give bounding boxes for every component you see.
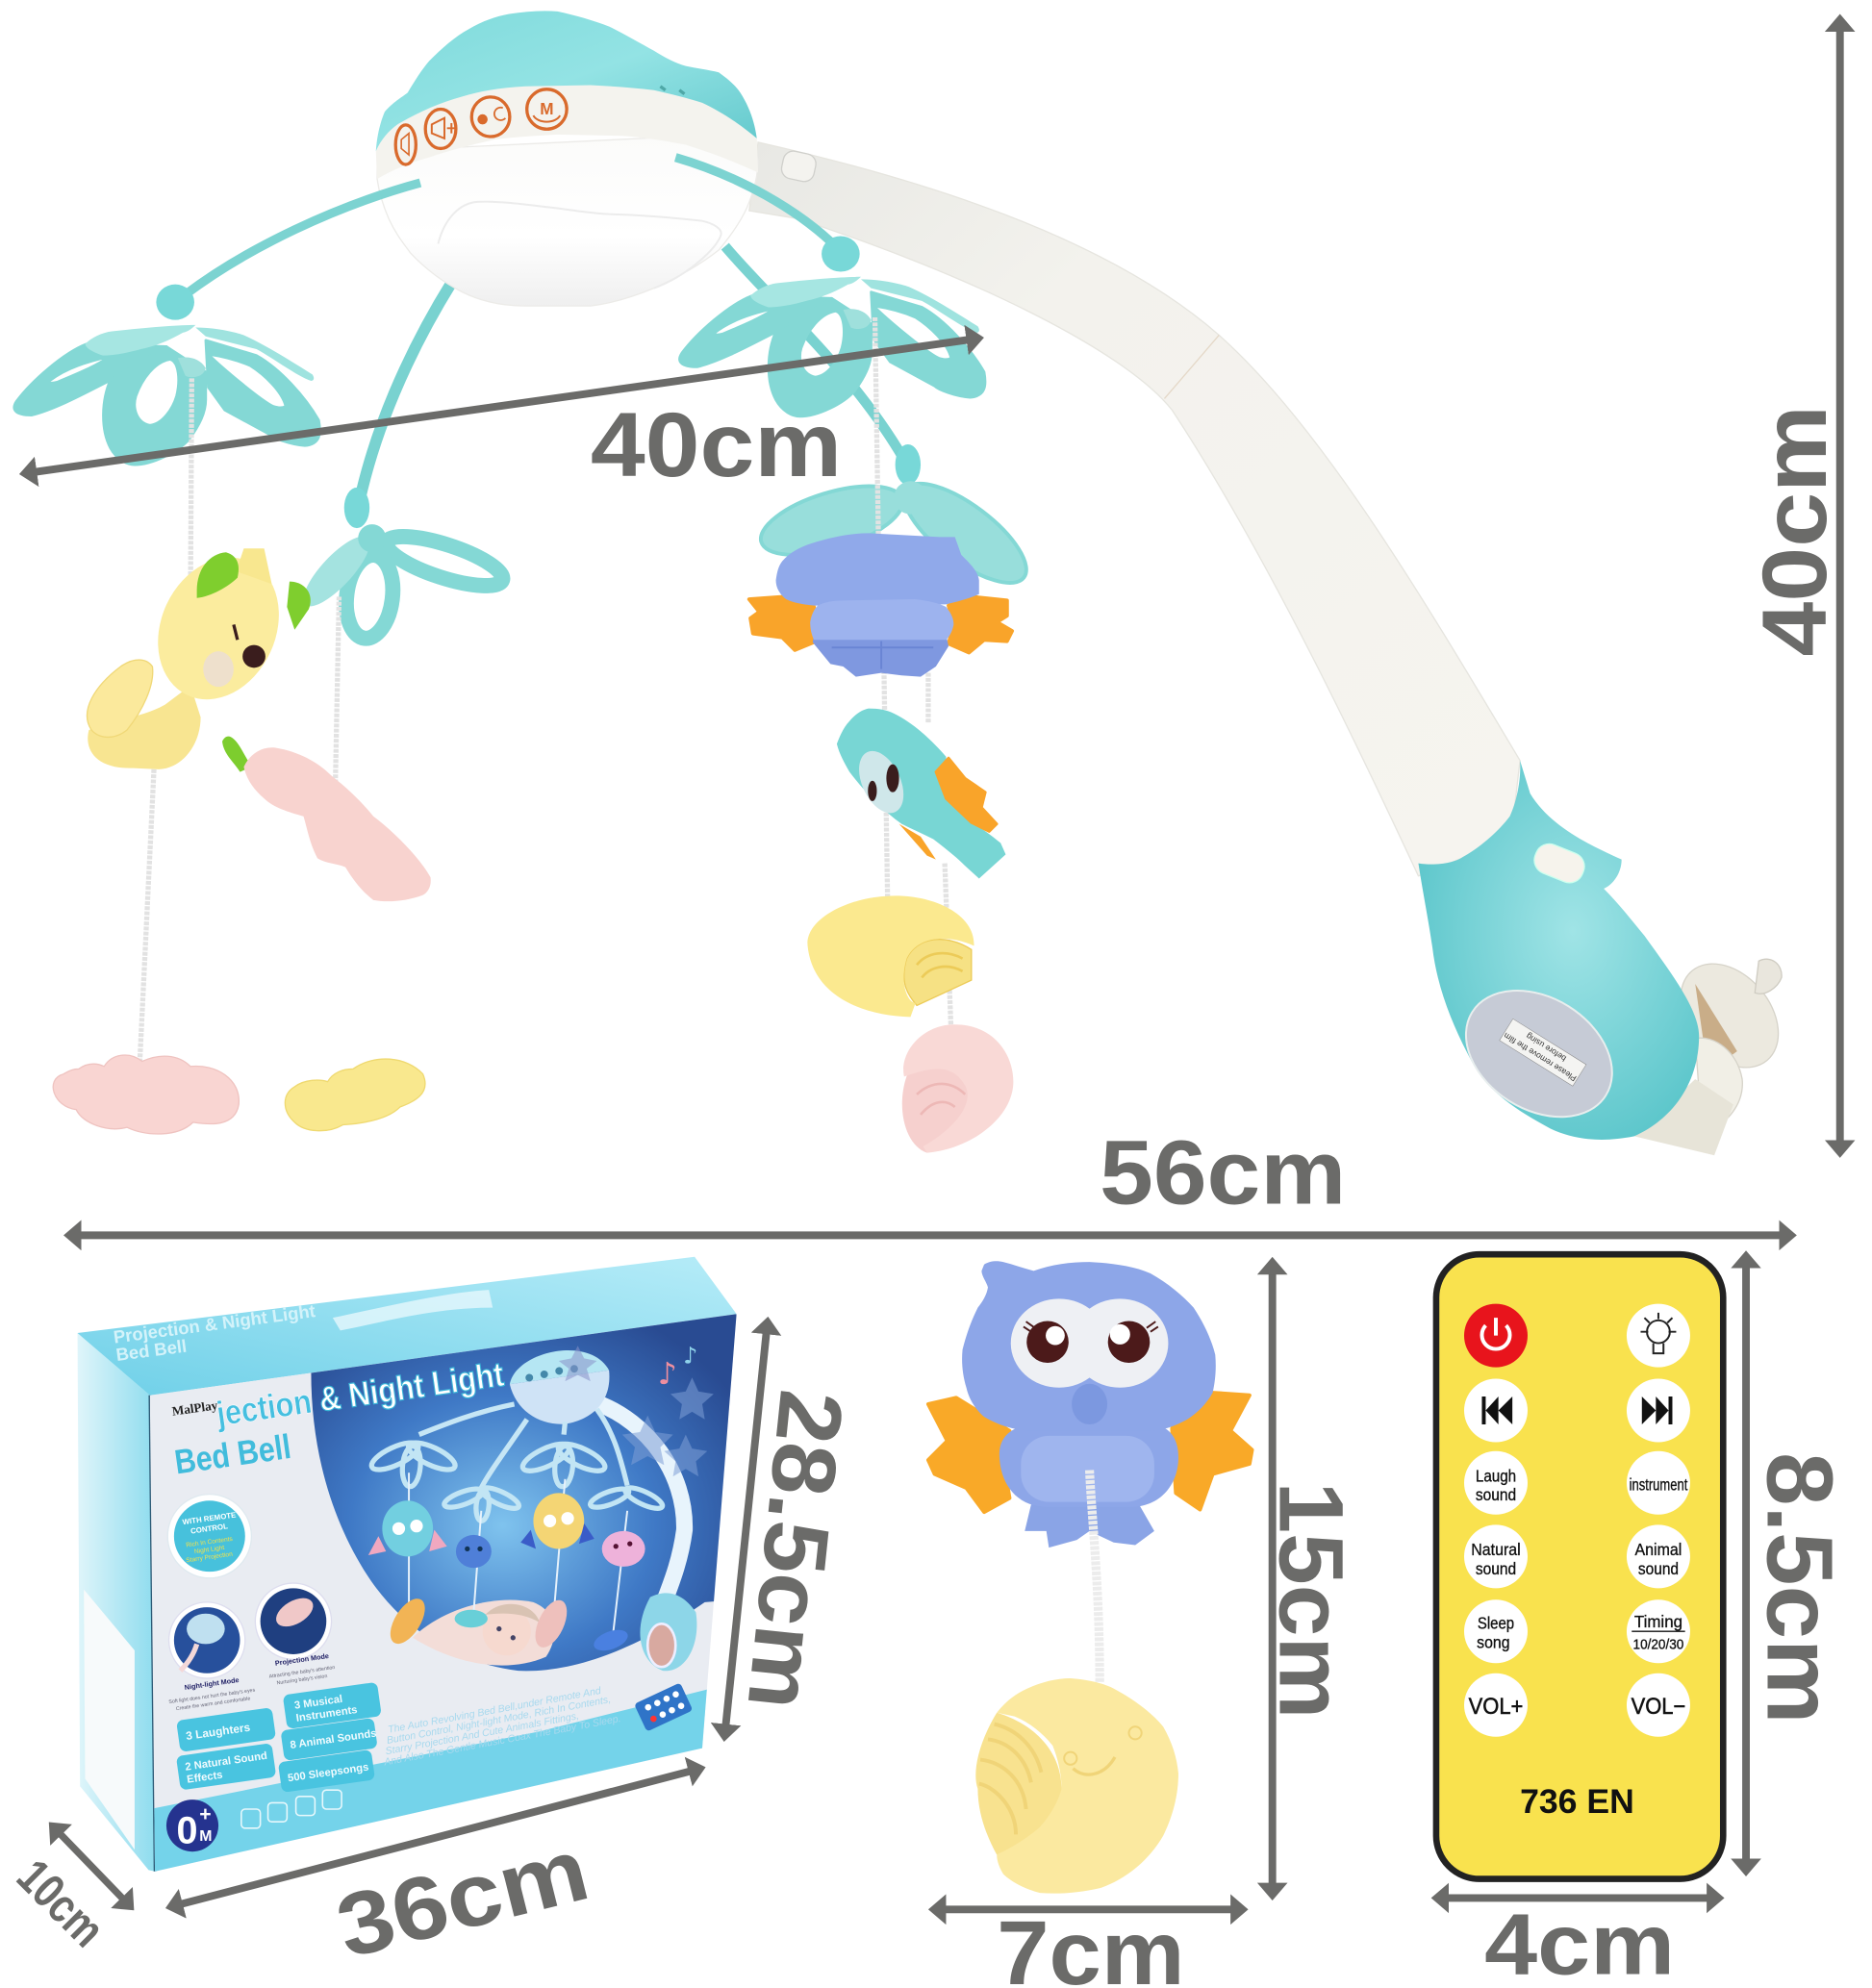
feature: 8 Animal Sounds: 8 Animal Sounds <box>290 1727 377 1751</box>
age badge: M <box>199 1828 212 1845</box>
remote badge: Night Light <box>194 1545 225 1555</box>
box title: jection & Night Light <box>214 1355 506 1433</box>
button: laugh sound: Laugh <box>1476 1466 1516 1485</box>
remote body <box>1436 1254 1723 1879</box>
owl belly <box>1021 1436 1154 1502</box>
remote badge: WITH REMOTE <box>182 1511 237 1526</box>
box front <box>150 1314 737 1872</box>
mode: projection: Projection Mode <box>274 1651 329 1668</box>
box lid: Bed Bell <box>114 1336 188 1365</box>
mode: night light: Create the warm and comfortable <box>176 1696 251 1712</box>
dome: white band <box>376 85 758 179</box>
feature: 3 Laughters: 3 Laughters <box>185 1721 251 1743</box>
photo: bed bell mobile <box>14 11 1798 1155</box>
toy: pink carrot <box>222 737 431 901</box>
label: 56cm: 56cm <box>1100 1121 1346 1223</box>
button: natural sound: sound <box>1476 1559 1516 1578</box>
box mini toys <box>391 1598 627 1650</box>
dome: control buttons <box>395 89 567 164</box>
arrow: mobile height <box>1837 24 1843 1147</box>
button: animal sound: sound <box>1638 1559 1679 1578</box>
box description: And Also The Gentle Music Coax The Baby To Sleep. <box>382 1713 621 1769</box>
toy: teal owl <box>837 709 1005 878</box>
button: sleep song <box>1464 1599 1528 1663</box>
toy: blue owl <box>749 533 1012 677</box>
toy: yellow moon <box>807 895 974 1017</box>
feature: 3 Musical Instruments: Instruments <box>295 1704 358 1724</box>
feature: 2 Natural Sound Effects: 2 Natural Sound <box>185 1750 268 1774</box>
label: 8.5cm: 8.5cm <box>1747 1452 1852 1724</box>
button: animal sound: Animal <box>1635 1540 1682 1559</box>
base: sticker: before using <box>1524 1031 1568 1064</box>
label: 40cm height: 40cm <box>1744 405 1846 656</box>
button: volume down <box>1627 1673 1690 1737</box>
stem joints <box>156 237 921 528</box>
box mini dome <box>510 1350 610 1424</box>
box description: Button Control, Night-light Mode, Rich In Contents, <box>386 1694 612 1747</box>
dome: M button label: M <box>540 99 554 118</box>
dome: speaker slots <box>660 87 685 94</box>
box description <box>382 1685 621 1769</box>
owl feet <box>1025 1504 1154 1548</box>
photo: owl toy with moon <box>928 1261 1252 1894</box>
mobile arm <box>749 142 1520 876</box>
box bottom teal band <box>154 1689 707 1872</box>
button: sleep song: Sleep <box>1478 1614 1514 1633</box>
box baby <box>413 1600 554 1666</box>
box side <box>78 1333 155 1872</box>
base button <box>1530 840 1588 887</box>
remote control <box>1436 1254 1723 1879</box>
box mini flowers <box>368 1438 665 1522</box>
box mini strings <box>409 1472 627 1631</box>
mode: projection: Nurturing baby's vision <box>276 1673 328 1686</box>
label: 36cm: 36cm <box>327 1819 597 1976</box>
button: laugh sound: sound <box>1476 1485 1516 1504</box>
box subtitle: Bed Bell <box>172 1427 293 1481</box>
box skill icons <box>241 1790 342 1828</box>
stem: rear right <box>725 246 904 460</box>
label: 28.5cm: 28.5cm <box>729 1386 863 1715</box>
stem: front right <box>675 158 841 251</box>
arrow: remote width <box>1441 1895 1714 1900</box>
box description: The Auto Revolving Bed Bell,under Remote And <box>387 1685 603 1736</box>
owl beak <box>1072 1384 1107 1424</box>
mode: night light: Night-light Mode <box>184 1675 240 1692</box>
button: timing: Timing <box>1634 1612 1682 1631</box>
owl head <box>962 1261 1216 1431</box>
arrow: box height <box>725 1326 767 1731</box>
dome: teal cap <box>376 11 757 151</box>
button: next <box>1627 1379 1690 1443</box>
dome: lower white body <box>377 134 758 306</box>
button: light <box>1627 1304 1690 1368</box>
remote badge <box>167 1495 251 1578</box>
owl wings <box>928 1393 1252 1512</box>
feature: 2 Natural Sound Effects <box>176 1743 276 1790</box>
box music notes: ♪ <box>683 1343 697 1370</box>
owl body <box>999 1424 1178 1507</box>
base: teal housing <box>1418 761 1699 1140</box>
box lid: Projection & Night Light <box>113 1300 316 1347</box>
stem: front left <box>186 183 420 294</box>
feature: 500 Sleepsongs: 500 Sleepsongs <box>287 1762 369 1784</box>
toy: yellow cloud <box>285 1059 425 1131</box>
remote badge: CONTROL <box>190 1522 229 1536</box>
button: laugh sound <box>1464 1451 1528 1515</box>
box music notes <box>660 1346 696 1385</box>
box music notes: ♪ <box>658 1357 677 1392</box>
remote model: 736 EN <box>1520 1782 1634 1821</box>
mode: projection: Attracting the baby's attention <box>268 1665 336 1680</box>
clamp <box>1634 944 1798 1155</box>
flower: right <box>679 277 985 416</box>
feature: 3 Musical Instruments: 3 Musical <box>293 1694 343 1712</box>
mode: night light: Soft light does not hurt the baby's eyes <box>168 1688 256 1705</box>
arrow: owl width <box>939 1906 1238 1912</box>
button: sleep song: song <box>1477 1632 1510 1651</box>
box logo: MalPlay <box>171 1397 219 1419</box>
cord <box>1090 1471 1100 1682</box>
box front edge <box>150 1396 155 1872</box>
flower: lower left <box>294 524 508 642</box>
toy: yellow bear <box>88 538 311 769</box>
mode: projection <box>255 1583 336 1686</box>
feature: 8 Animal Sounds <box>281 1718 378 1761</box>
arrow: mobile width <box>29 339 974 473</box>
box mini owls <box>368 1493 645 1568</box>
strings <box>139 317 951 1064</box>
base: sticker: Please remove the film <box>1502 1031 1578 1083</box>
box side panel <box>84 1590 135 1850</box>
age badge: 0 <box>177 1810 198 1852</box>
dome: embossed oval <box>438 202 721 289</box>
arm seam <box>1164 335 1219 398</box>
button: natural sound: Natural <box>1471 1540 1521 1559</box>
arrow: owl height <box>1270 1267 1276 1890</box>
button: timing <box>1627 1599 1690 1663</box>
arm switch <box>780 149 818 184</box>
button: volume down: VOL− <box>1632 1694 1685 1720</box>
moon <box>975 1678 1178 1894</box>
arrow: remote height <box>1743 1261 1749 1866</box>
box stars <box>559 1346 714 1476</box>
mode: night light <box>168 1602 256 1712</box>
feature: 3 Musical Instruments <box>283 1682 382 1729</box>
box mini arm <box>596 1403 685 1612</box>
toy: pink cloud <box>53 1055 239 1134</box>
base: sticker <box>1500 1019 1586 1086</box>
arrow: mobile length <box>74 1232 1786 1238</box>
remote badge: Rich In Contents <box>186 1536 234 1549</box>
label: 40cm width: 40cm <box>591 394 842 496</box>
button: natural sound <box>1464 1524 1528 1588</box>
feature: 2 Natural Sound Effects: Effects <box>187 1770 223 1786</box>
owl eyes <box>1011 1298 1168 1388</box>
button: previous <box>1464 1379 1528 1443</box>
button: instrument: instrument <box>1630 1475 1687 1495</box>
box top strip <box>150 1390 189 1396</box>
button: instrument <box>1627 1451 1690 1515</box>
label: 15cm: 15cm <box>1260 1481 1362 1719</box>
base: grey label disc <box>1443 965 1635 1143</box>
box remote <box>634 1682 693 1731</box>
toy: pink moon <box>902 1024 1013 1153</box>
feature: 500 Sleepsongs <box>278 1749 375 1793</box>
age badge: + <box>199 1803 212 1825</box>
box mini stems <box>419 1404 627 1488</box>
box lid <box>78 1257 737 1396</box>
photo: product box <box>78 1257 762 1892</box>
label: 10cm: 10cm <box>7 1850 114 1957</box>
age badge <box>166 1799 218 1852</box>
arrow: box width <box>175 1770 696 1905</box>
remote badge: Starry Projection <box>186 1551 234 1564</box>
button: volume up: VOL+ <box>1469 1694 1523 1720</box>
button: timing: 10/20/30 <box>1633 1638 1683 1653</box>
box description: Starry Projection And Cute Animals Fittings, <box>385 1710 580 1757</box>
box night scene <box>311 1308 737 1671</box>
flower: left <box>14 325 319 465</box>
button: volume up <box>1464 1673 1528 1737</box>
arrow: box depth <box>56 1829 127 1903</box>
button: animal sound <box>1627 1524 1690 1588</box>
stem: rear left <box>360 282 452 501</box>
flower: lower right <box>753 466 1041 600</box>
button: power <box>1464 1304 1528 1368</box>
box mini base <box>640 1593 696 1671</box>
feature: 3 Laughters <box>176 1707 276 1752</box>
